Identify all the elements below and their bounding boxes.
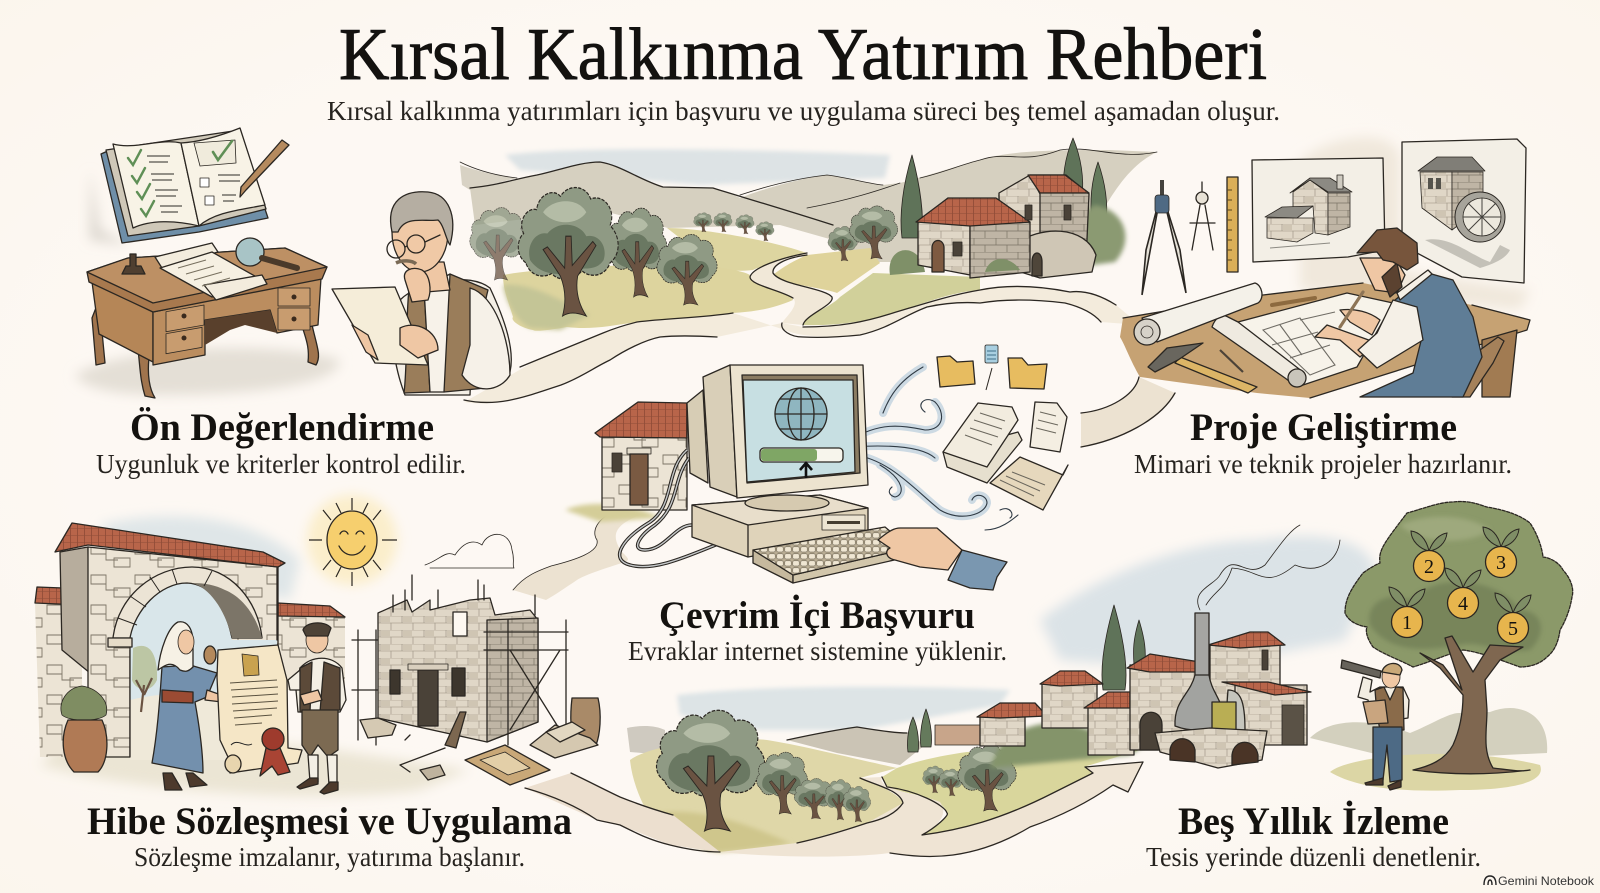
heading: Hibe Sözleşmesi ve Uygulama <box>87 800 572 843</box>
icon: cables <box>620 450 723 567</box>
fruit 2 <box>1411 531 1447 582</box>
icon: swirling data stream <box>850 367 1018 530</box>
grant contract scroll <box>204 645 302 776</box>
fruit 3: 3 <box>1496 552 1506 574</box>
icon: pen <box>240 140 289 197</box>
icon: village houses <box>935 632 1311 768</box>
icon: fruit tree with numbered fruit <box>1345 502 1573 774</box>
icon: desktop computer <box>687 365 868 557</box>
description: Uygunluk ve kriterler kontrol edilir. <box>96 449 466 479</box>
icon: smiling sun <box>307 495 397 586</box>
winding road: top <box>464 286 1140 404</box>
icon: open checklist book <box>90 128 268 245</box>
poster: house sketch <box>1252 158 1385 262</box>
icon: olive tree inside arch <box>132 646 157 712</box>
heading: Proje Geliştirme <box>1190 406 1457 449</box>
winding road: project to computer <box>1081 377 1175 447</box>
panel: çevrim içi başvuru <box>565 345 1068 666</box>
icon: olive trees <box>470 188 898 316</box>
panel: proje geliştirme <box>1120 138 1530 479</box>
description: Sözleşme imzalanır, yatırıma başlanır. <box>134 842 525 872</box>
man reading a paper <box>332 192 511 395</box>
winding road and arrow <box>525 762 1143 857</box>
drafting desk <box>1120 283 1530 398</box>
ruler and hammer <box>1175 357 1257 393</box>
watermark: Gemini Notebook: Gemini Notebook <box>1498 874 1595 888</box>
panel: beş yıllık izleme <box>525 502 1573 872</box>
fruit 3 <box>1483 527 1519 578</box>
fruit 1 <box>1389 587 1425 638</box>
man in vest <box>288 623 346 794</box>
panel: hibe sözleşmesi ve uygulama <box>35 495 600 872</box>
icon: flying papers <box>943 402 1068 510</box>
icon: barrel, bricks, tools <box>360 698 600 785</box>
icon: cypress trees <box>908 605 1145 752</box>
subtitle: Kırsal kalkınma yatırımları için başvuru ve uygulama süreci beş temel aşamadan oluşur. <box>327 96 1280 126</box>
heading: Beş Yıllık İzleme <box>1178 799 1449 843</box>
fruit 4 <box>1445 568 1481 618</box>
fruit 2: 2 <box>1424 556 1434 578</box>
rolled paper <box>1142 283 1262 342</box>
fruit 5 <box>1495 593 1531 644</box>
icon: compasses and ruler <box>1142 177 1238 295</box>
icon: typing hand <box>878 528 1007 590</box>
blueprint sheet <box>1238 293 1393 387</box>
title: Kırsal Kalkınma Yatırım Rehberi <box>339 14 1267 96</box>
icon: wooden desk <box>75 238 340 398</box>
fruit 4: 4 <box>1458 593 1468 615</box>
poster: water mill sketch <box>1402 139 1526 283</box>
wall wash <box>1300 138 1530 310</box>
icon: terracotta pot with plant <box>61 686 107 772</box>
icon: building under construction <box>352 575 568 745</box>
icon: smoke <box>1198 525 1340 610</box>
description: Evraklar internet sistemine yüklenir. <box>628 636 1007 666</box>
heading: Çevrim İçi Başvuru <box>659 593 975 637</box>
icon: observer with telescope <box>1341 660 1409 790</box>
chair <box>1448 337 1504 397</box>
fruit 1: 1 <box>1402 612 1412 634</box>
landscape wash and hills <box>627 536 1547 852</box>
scene: hills and olive grove landscape <box>460 138 1157 331</box>
woman holding scroll <box>152 622 227 790</box>
winding road: computer to grant <box>513 510 640 600</box>
icon: distillery still and oven <box>1155 613 1267 768</box>
description: Mimari ve teknik projeler hazırlanır. <box>1134 449 1512 479</box>
icon: olive trees <box>657 710 1016 831</box>
icon: cypress trees <box>901 138 1107 238</box>
heading: Ön Değerlendirme <box>130 406 434 449</box>
icon: stone farmhouses <box>890 175 1125 278</box>
icon: keyboard <box>753 527 912 583</box>
description: Tesis yerinde düzenli denetlenir. <box>1146 842 1481 872</box>
icon: outlined cloud <box>425 534 514 568</box>
icon: folders and document <box>937 345 1047 390</box>
man drafting <box>1315 228 1482 397</box>
icon: stone arch gate <box>35 523 345 760</box>
panel: ön değerlendirme <box>75 128 511 479</box>
fruit 5: 5 <box>1508 618 1518 640</box>
icon: small stone house <box>565 402 687 522</box>
